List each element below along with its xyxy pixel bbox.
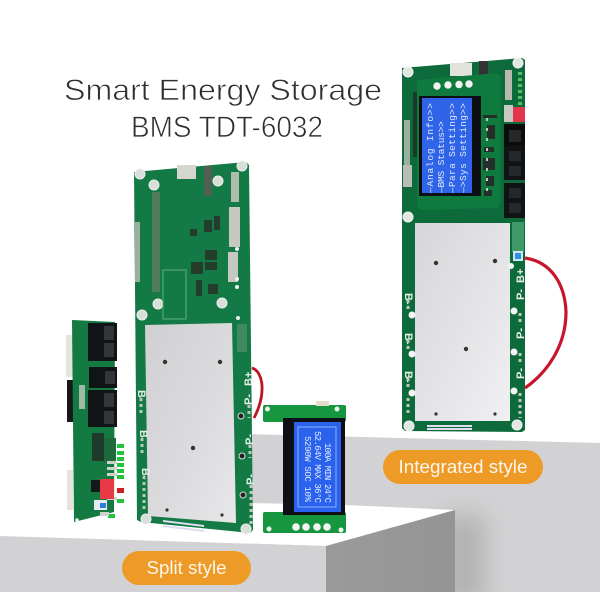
red wire: integrated <box>525 258 566 388</box>
pin block <box>79 385 85 409</box>
edge labels: B+ <box>243 372 255 386</box>
edge labels: P- <box>515 289 527 300</box>
label: split style <box>122 551 251 585</box>
edge pads <box>238 413 246 498</box>
board: LCD module: 5290W SOC 10% <box>302 436 312 503</box>
edge pad rows <box>141 398 251 525</box>
display PCB <box>417 73 501 210</box>
board: integrated style: —Para Setting>> <box>447 103 458 194</box>
LEDs column <box>518 72 522 105</box>
pin header <box>413 92 418 157</box>
edge labels: B- <box>135 390 147 402</box>
pin header <box>152 192 160 292</box>
dip switch <box>513 107 525 122</box>
board: LCD module: 100A MIN 24°C <box>322 443 332 504</box>
board: integrated style: —BMS Status>> <box>436 121 447 194</box>
green terminal <box>512 222 524 252</box>
edge labels: B+ <box>515 269 527 283</box>
title: Smart Energy Storage <box>64 74 382 107</box>
hole <box>75 518 79 522</box>
edge labels: B- <box>402 333 414 345</box>
LCD <box>419 96 481 196</box>
board: LCD module <box>263 401 346 533</box>
label: integrated style: Integrated style <box>398 457 528 477</box>
LEDs <box>108 444 124 518</box>
blue button <box>513 251 523 261</box>
mounting holes <box>403 58 523 431</box>
outlined pad <box>163 270 186 319</box>
bottom strip <box>163 520 204 527</box>
ic cluster <box>190 216 220 296</box>
bottom strip <box>427 425 472 427</box>
board: split style main <box>134 161 257 534</box>
board: integrated style <box>402 58 527 432</box>
relay area <box>92 433 104 461</box>
edge labels: P- <box>515 328 527 339</box>
rj45 ports <box>88 323 117 427</box>
holes <box>265 406 344 532</box>
heatsink screws <box>163 360 224 517</box>
edge labels: B- <box>139 468 151 480</box>
LCD <box>283 418 345 515</box>
side connectors <box>66 335 73 377</box>
board: integrated style: —>Sys Setting>> <box>458 103 469 194</box>
edge labels: P- <box>243 394 255 405</box>
LED legs <box>100 461 117 516</box>
ports outline <box>235 247 240 320</box>
edge labels: B- <box>137 430 149 442</box>
edge labels: P- <box>515 368 527 379</box>
mounting holes <box>135 161 251 534</box>
heatsink screws <box>434 259 497 416</box>
edge labels: B- <box>402 371 414 383</box>
top connector <box>450 63 472 76</box>
components <box>483 115 497 196</box>
terminal <box>237 324 247 352</box>
edge labels <box>402 269 527 383</box>
edge labels: B- <box>402 293 414 305</box>
edge labels: P- <box>244 434 256 445</box>
side connector <box>505 70 512 100</box>
keypad <box>433 80 473 90</box>
edge pad rows <box>408 300 520 418</box>
edge pads <box>408 263 518 396</box>
blue button <box>94 500 107 510</box>
connector <box>316 401 329 406</box>
red wire: split <box>252 368 262 418</box>
rj45 ports <box>504 124 525 218</box>
edge labels <box>135 372 257 485</box>
display PCB pads <box>486 118 488 195</box>
title: BMS TDT-6032 <box>131 111 323 144</box>
label: split style: Split style <box>146 558 226 578</box>
red LED <box>117 488 124 493</box>
side connectors <box>231 172 239 202</box>
label: integrated style <box>383 450 543 484</box>
dip switch <box>100 479 114 499</box>
edge labels: P- <box>245 474 257 485</box>
board: communication module <box>66 320 124 522</box>
title <box>64 74 382 144</box>
keypad <box>292 523 331 531</box>
top connector <box>177 165 196 179</box>
heatsink <box>415 223 510 421</box>
board: integrated style: —Analog Info>> <box>425 103 436 194</box>
board: LCD module: 52.64V MAX 36°C <box>312 431 322 504</box>
heatsink <box>145 323 236 523</box>
